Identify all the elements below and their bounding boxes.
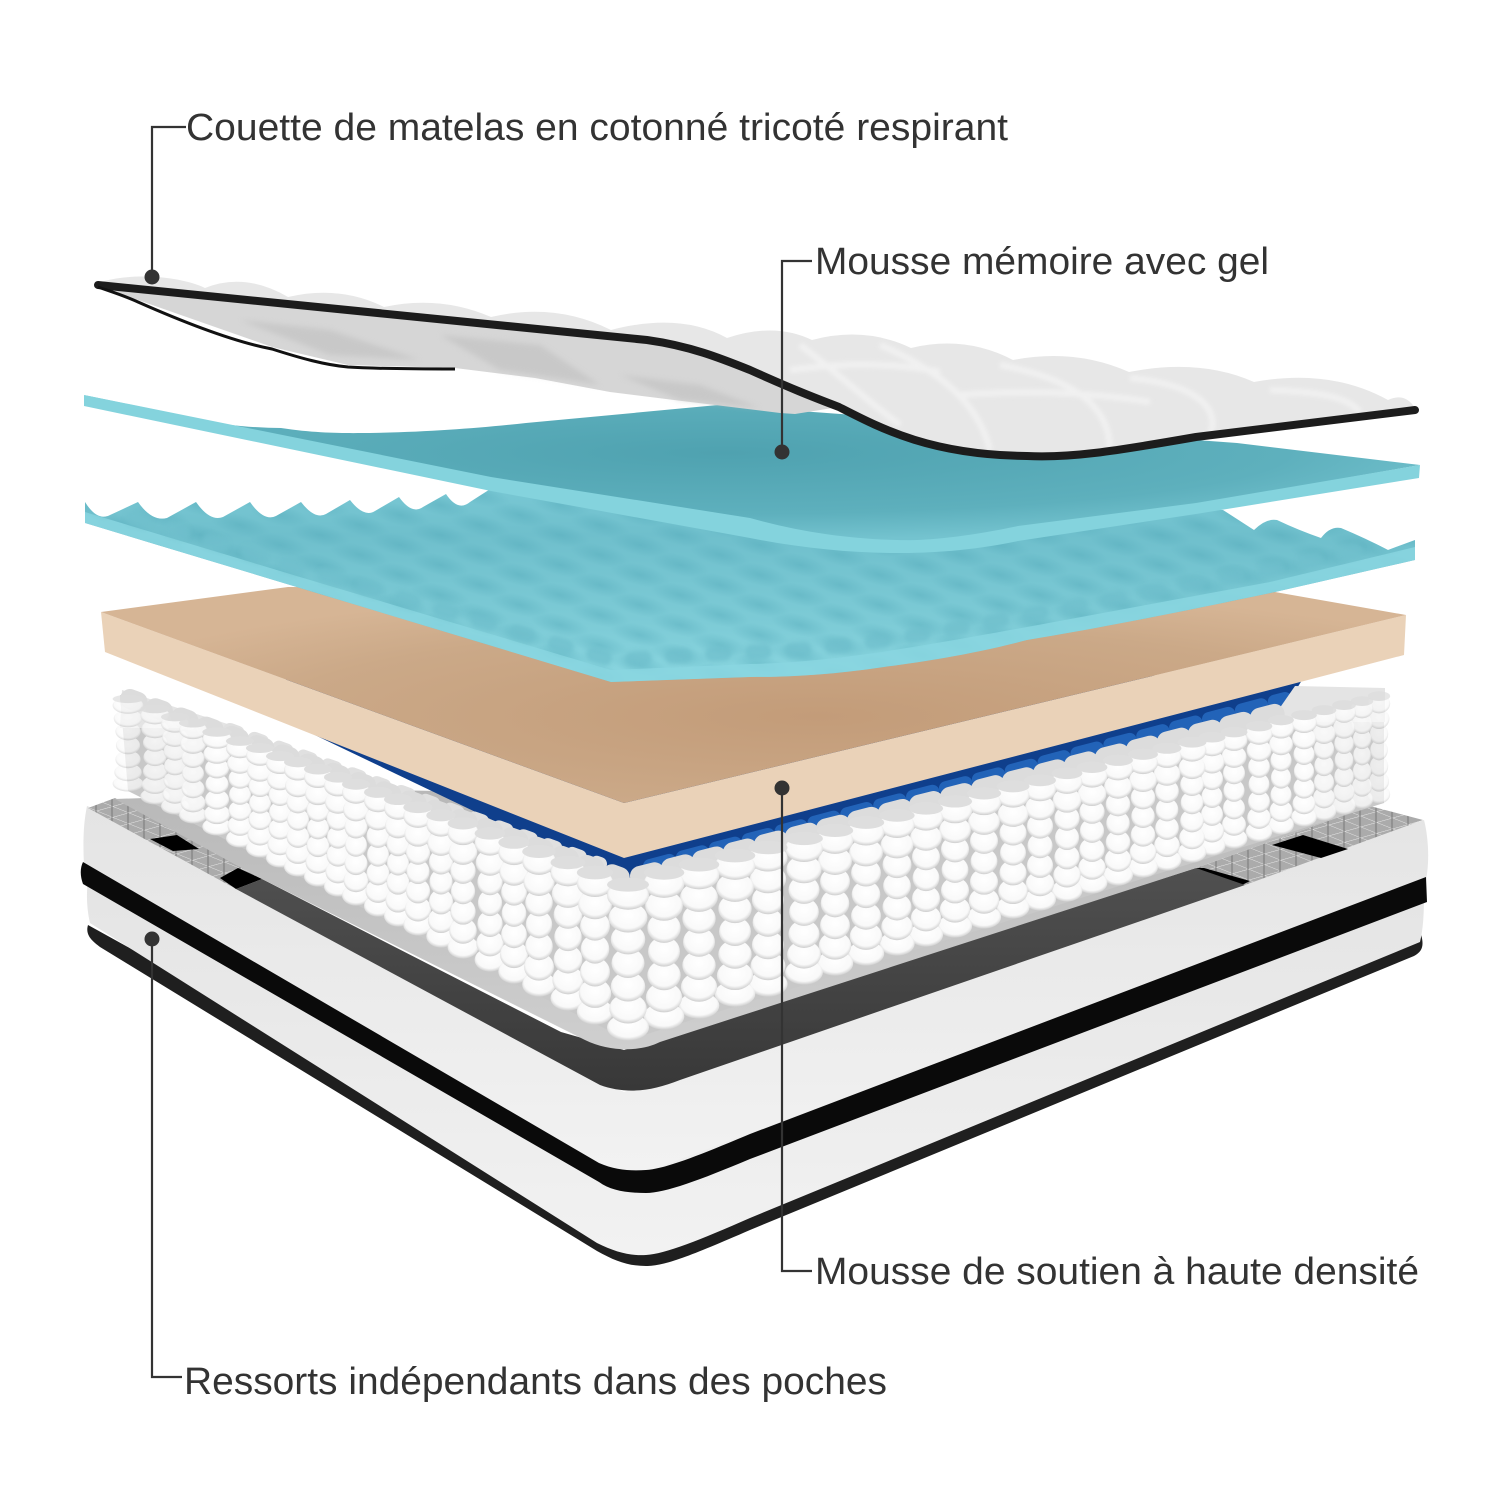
foam side faces [101,612,1406,858]
cover underside [98,285,839,414]
egg crate memory foam layer [85,486,1415,682]
upper white panel [83,806,1428,1172]
leader: cover [144,127,186,284]
high density support foam layer [101,587,1406,858]
lower white panel [87,880,1424,1255]
light grey spring base [115,790,1370,1049]
gel foam top surface [84,395,1420,540]
foam base tone [85,486,1415,682]
corner coil column [607,878,649,1041]
upper pocket tops left [230,730,600,864]
underside shading patches [240,320,760,408]
right face coil columns [644,691,1390,1030]
exposed black slats [150,835,1348,889]
leader: pocket springs [144,932,182,1377]
leader: support foam [774,780,812,1271]
cover top surface [98,277,1415,456]
dark inner band [236,868,1245,1091]
black band [81,862,1427,1193]
label: pocket springs: Ressorts indépendants dans des poches [184,1361,887,1403]
far back spring tops [120,686,1385,728]
pocket springs block [113,675,1390,1041]
foam top surface [101,587,1406,803]
leader: gel memory foam [774,261,812,460]
blue spring tops [200,675,1305,885]
underside black trim [98,287,455,369]
mattress layers infographic [80,112,1428,1402]
base mattress [81,790,1428,1266]
knitted cotton quilted cover [98,277,1415,456]
gel memory foam layer [84,395,1420,553]
label: support foam: Mousse de soutien à haute densité [815,1251,1419,1293]
cover black piping [98,285,1415,456]
pocket tops left [130,699,628,880]
left face coil columns [113,695,613,1025]
label: cover: Couette de matelas en cotonné tricoté respirant [186,107,1008,149]
quilting folds [790,345,1360,450]
label: gel memory foam: Mousse mémoire avec gel [815,241,1269,283]
gel foam side edge [84,395,1420,553]
spring backing [120,695,1384,1040]
bottom black rim [87,925,1423,1266]
pocket tops right [640,710,1290,876]
foam bump texture [85,486,1415,682]
foam front edge with soft scallops [85,506,1415,682]
quilted grid recess [88,798,1423,889]
